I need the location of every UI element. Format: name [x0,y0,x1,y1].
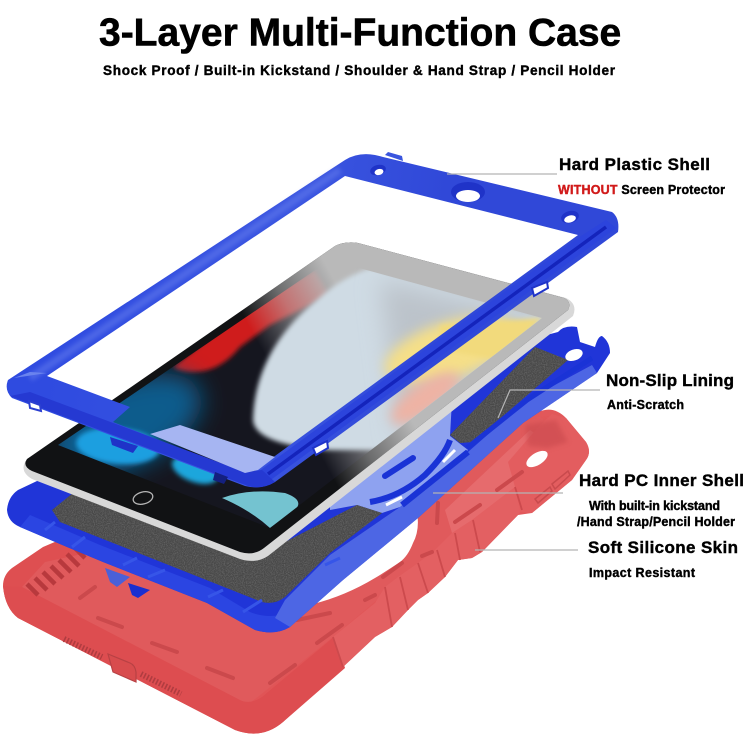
charging port [108,654,136,682]
large camera hole [451,182,485,202]
channel upper [467,358,592,448]
foam lining left [52,493,382,603]
small hole right opening [563,214,577,224]
label: soft silicone skin [475,538,738,580]
frame rim channel right [268,227,606,474]
side clip corner [213,472,228,484]
label: non-slip lining [498,371,734,418]
upper knob [508,414,589,513]
small hole right [560,209,580,225]
shell body [7,327,610,632]
kickstand tabs [105,568,130,587]
home button [132,490,154,506]
rim clips [45,522,340,612]
knob inner shadow [525,420,568,448]
pink glow [386,368,461,429]
channel lower [402,452,468,505]
corner facet [14,372,47,378]
rim lower right band [333,487,522,667]
pill slot [385,458,413,476]
tablet silver edge [24,242,574,561]
inner ribs [27,548,85,595]
grip ridges [333,487,522,667]
heading: Non-Slip Lining [606,371,734,390]
layer: hard plastic shell frame [7,152,618,487]
leader line [498,390,600,418]
cyan blob [168,458,219,488]
yellow blob [378,310,514,389]
frame dark rim bottom [10,392,275,487]
foam lining right [450,347,568,443]
layer: tablet [24,242,574,561]
tablet body [25,242,569,553]
frame body [7,154,618,487]
subtext line two: /Hand Strap/Pencil Holder [577,515,735,529]
layer: red silicone skin [3,410,589,734]
translucent lower strip [150,425,275,473]
leader line [475,549,578,551]
wallpaper [58,271,348,528]
white cut-out [300,512,418,612]
corner hole [564,347,584,363]
outer wall highlight [20,515,290,632]
side clip right lower [313,441,328,455]
heading: Hard PC Inner Shell [579,471,744,490]
side clip left [29,401,41,411]
strap hole [524,448,550,470]
heading: Soft Silicone Skin [588,538,738,557]
red blob [173,270,330,372]
right tint [378,280,528,404]
subtext: WITHOUT Screen Protector [558,183,725,197]
side slots [80,472,522,683]
side clip bottom [110,437,138,453]
title: 3-Layer Multi-Function Case [99,12,621,54]
small hole left opening [374,168,384,176]
blue glow [58,359,216,479]
subtext: Anti-Scratch [607,398,684,412]
label: hard pc inner shell [433,471,744,529]
small hole left [369,163,387,177]
knob slots [535,471,570,503]
ring gaps [386,450,455,505]
silicone body [3,410,589,734]
side clip right [532,282,548,296]
blue blob [75,424,161,468]
speaker grilles [64,639,181,694]
layer: blue inner shell [7,327,610,632]
frame rim right [258,220,616,482]
top right tab [385,152,403,161]
teal blob [222,491,298,528]
rim wall [3,586,345,734]
plate under shell highlight [445,430,545,533]
rotating disc area [330,400,468,513]
subtext: Impact Resistant [589,566,696,580]
inner floor shading [22,416,572,703]
leader line [433,492,563,494]
left strip highlight [30,170,340,378]
ring groove [370,440,450,502]
outer strip lower right [275,365,597,627]
label: hard plastic shell [447,155,725,197]
frosted film fade [25,242,569,553]
heading: Hard Plastic Shell [559,155,710,174]
frosted pale shape [253,268,545,450]
camera hole opening [456,190,480,202]
subtitle: Shock Proof / Built-in Kickstand / Shoulder & Hand Strap / Pencil Holder [103,63,616,78]
subtext line one: With built-in kickstand [589,499,720,513]
leader line [447,173,557,175]
